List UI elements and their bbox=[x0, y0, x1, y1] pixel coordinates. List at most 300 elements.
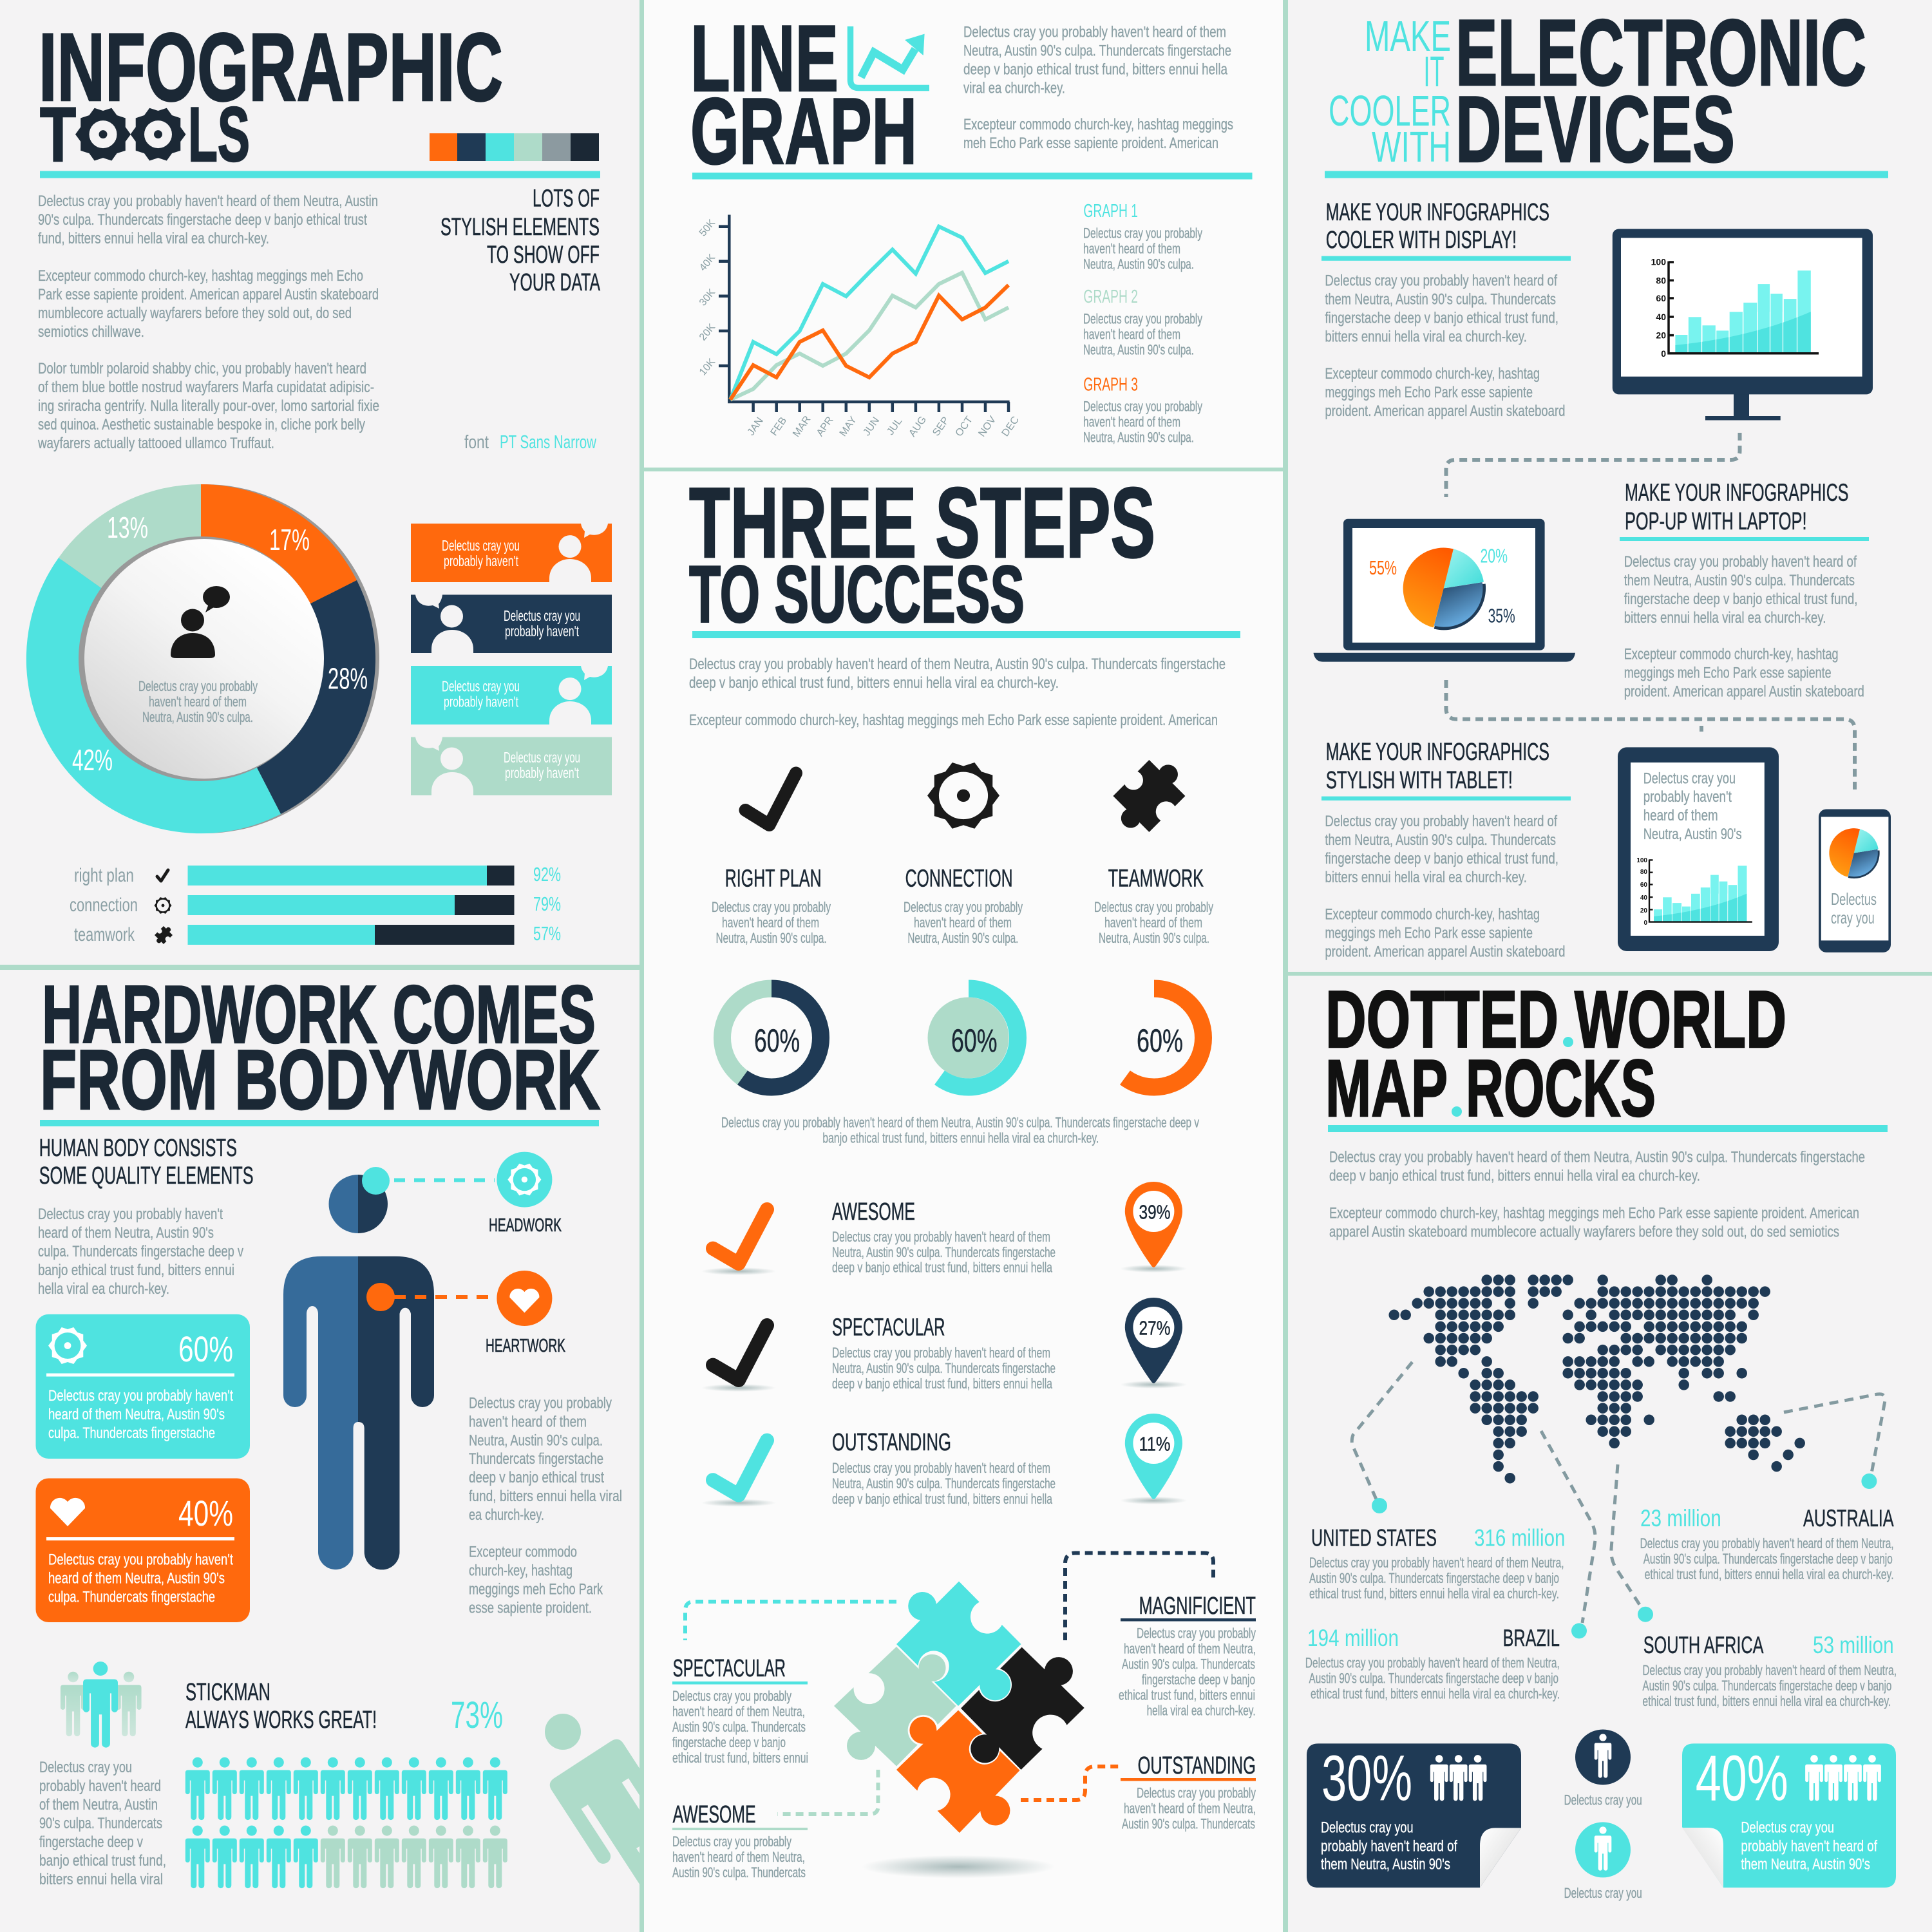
connector: monitor to laptop bbox=[1446, 433, 1740, 497]
list item: awesome: Neutra, Austin 90's culpa. Thundercats fingerstache bbox=[832, 1244, 1056, 1260]
banner: navy: probably haven't bbox=[505, 623, 579, 639]
body text: Dolor tumblr polaroid shabby chic, you probably haven't heard bbox=[38, 360, 366, 377]
body text: Park esse sapiente proident. American apparel Austin skateboard bbox=[38, 286, 379, 303]
list item: spectacular: deep v banjo ethical trust fund, bitters ennui hella bbox=[832, 1376, 1053, 1392]
body text: Excepteur commodo church-key, hashtag meggings meh Echo bbox=[38, 267, 363, 285]
banner: cyan: Delectus cray you bbox=[442, 678, 520, 695]
heading: stickman: STICKMAN bbox=[185, 1679, 270, 1706]
line chart: APR bbox=[815, 415, 836, 439]
line chart: 30K bbox=[697, 287, 717, 308]
subheading: human body bbox=[39, 1135, 254, 1189]
callout: outstanding: OUTSTANDING bbox=[1138, 1752, 1256, 1779]
section: laptop: meggings meh Echo Park esse sapiente bbox=[1624, 665, 1832, 681]
subheading: human body: SOME QUALITY ELEMENTS bbox=[39, 1162, 254, 1189]
section: tablet: Excepteur commodo church-key, hashtag bbox=[1325, 906, 1540, 923]
section: display bbox=[1321, 199, 1571, 420]
list item: outstanding: Neutra, Austin 90's culpa. Thundercats fingerstache bbox=[832, 1475, 1056, 1492]
list item: awesome: deep v banjo ethical trust fund, bitters ennui hella bbox=[832, 1260, 1053, 1275]
country: brazil: Delectus cray you probably haven't heard of them Neutra, bbox=[1305, 1655, 1560, 1671]
side text: Excepteur commodo bbox=[469, 1543, 577, 1561]
legend: graph 1: haven't heard of them bbox=[1083, 241, 1180, 256]
callout: outstanding bbox=[1121, 1752, 1256, 1832]
stickman text: fingerstache deep v bbox=[39, 1833, 143, 1851]
title: make it cooler with electronic devices bbox=[1329, 0, 1866, 182]
callout: magnificient: ethical trust fund, bitters ennui bbox=[1119, 1687, 1255, 1703]
side heading: LOTS OF bbox=[533, 185, 600, 213]
step: teamwork: Delectus cray you probably bbox=[1094, 899, 1213, 915]
bar chart: skills: 79% bbox=[533, 893, 561, 915]
device: phone: cray you bbox=[1831, 908, 1875, 927]
legend: graph 3 bbox=[1083, 375, 1202, 446]
donut chart bbox=[26, 484, 379, 833]
section: display: bitters ennui hella viral ea church-key. bbox=[1325, 328, 1527, 345]
line chart: JUL bbox=[885, 416, 904, 437]
list item: awesome bbox=[701, 1198, 1056, 1275]
line chart: JAN bbox=[746, 415, 766, 438]
title: dotted world map rocks: ROCKS bbox=[1466, 1044, 1656, 1133]
side text: Thundercats fingerstache bbox=[469, 1450, 603, 1468]
body text: fund, bitters ennui hella viral ea church-key. bbox=[38, 230, 269, 247]
pin: 27% bbox=[1120, 1298, 1187, 1388]
title: infographic tools: T bbox=[40, 91, 76, 178]
donut chart: Neutra, Austin 90's culpa. bbox=[142, 709, 253, 725]
ring chart 1 bbox=[723, 989, 820, 1087]
banner: mint: Delectus cray you bbox=[504, 749, 580, 766]
callout: magnificient: haven't heard of them Neutra, bbox=[1124, 1641, 1256, 1656]
line chart: NOV bbox=[976, 414, 998, 439]
callout: awesome: Delectus cray you probably bbox=[672, 1833, 791, 1850]
connector: australia bbox=[1784, 1394, 1885, 1489]
side text: Neutra, Austin 90's culpa. bbox=[469, 1432, 603, 1450]
callout: magnificient: fingerstache deep v banjo bbox=[1142, 1672, 1255, 1687]
card: 60%: Delectus cray you probably haven't bbox=[48, 1387, 233, 1405]
icon: person badge navy: Delectus cray you bbox=[1564, 1792, 1642, 1808]
list item: outstanding bbox=[701, 1429, 1056, 1507]
callout: magnificient: Delectus cray you probably bbox=[1137, 1625, 1256, 1641]
icon: rising chart bbox=[850, 26, 929, 88]
title: line graph bbox=[690, 6, 917, 184]
title: make it cooler with electronic devices: DEVICES bbox=[1455, 77, 1735, 182]
side text: deep v banjo ethical trust bbox=[469, 1469, 604, 1486]
device: tablet bbox=[1618, 747, 1779, 951]
panel: electronic devices bbox=[1288, 0, 1932, 972]
callout: headwork bbox=[362, 1152, 562, 1236]
side text: fund, bitters ennui hella viral bbox=[469, 1488, 622, 1505]
panel: line graph bbox=[644, 0, 1283, 468]
body text bbox=[38, 1206, 243, 1298]
bar chart: skills bbox=[70, 863, 561, 945]
card: 60%: heard of them Neutra, Austin 90's bbox=[48, 1406, 225, 1423]
line chart: OCT bbox=[954, 415, 975, 439]
country: united states bbox=[1309, 1525, 1565, 1602]
intro text bbox=[963, 23, 1233, 152]
title: dotted world map rocks: MAP bbox=[1325, 1044, 1448, 1133]
step: connection: haven't heard of them bbox=[914, 914, 1012, 931]
body text: culpa. Thundercats fingerstache deep v bbox=[38, 1243, 243, 1260]
body text: of them blue bottle nostrud wayfarers Marfa cupidatat adipisic- bbox=[38, 379, 374, 396]
icon: person badge navy bbox=[1564, 1730, 1642, 1808]
callout: spectacular: fingerstache deep v banjo bbox=[672, 1734, 786, 1750]
country: united states: 316 million bbox=[1474, 1525, 1565, 1551]
country: brazil: ethical trust fund, bitters ennui hella viral ea church-key. bbox=[1311, 1686, 1560, 1702]
body text: wayfarers actually tattooed ullamco Truffaut. bbox=[37, 435, 274, 452]
stickman text: 90's culpa. Thundercats bbox=[39, 1815, 162, 1832]
ring caption: Delectus cray you probably haven't heard of them Neutra, Austin 90's culpa. Thundercats fingerstache deep v bbox=[721, 1115, 1199, 1131]
callout: outstanding: haven't heard of them Neutra, bbox=[1124, 1801, 1256, 1816]
list item: spectacular: SPECTACULAR bbox=[832, 1314, 945, 1341]
section: laptop: bitters ennui hella viral ea church-key. bbox=[1624, 609, 1826, 627]
card: 60%: 60% bbox=[178, 1329, 233, 1369]
section: laptop: POP-UP WITH LAPTOP! bbox=[1625, 508, 1807, 535]
callout: outstanding: Delectus cray you probably bbox=[1137, 1785, 1256, 1801]
connector: laptop to tablet and phone bbox=[1446, 680, 1855, 794]
side heading: TO SHOW OFF bbox=[487, 242, 600, 269]
callout: spectacular: haven't heard of them Neutra, bbox=[672, 1703, 805, 1719]
device: tablet: Neutra, Austin 90's bbox=[1643, 826, 1742, 843]
side heading bbox=[440, 185, 600, 296]
title: three steps: TO SUCCESS bbox=[689, 550, 1025, 639]
country: united states: ethical trust fund, bitters ennui hella viral ea church-key. bbox=[1309, 1586, 1559, 1602]
panel: infographic tools bbox=[0, 0, 639, 965]
list item: awesome: AWESOME bbox=[832, 1198, 915, 1226]
section: display: meggings meh Echo Park esse sapiente bbox=[1325, 384, 1533, 401]
section: tablet: MAKE YOUR INFOGRAPHICS bbox=[1326, 739, 1549, 766]
callout: spectacular: Delectus cray you probably bbox=[672, 1688, 791, 1704]
card: 30%: them Neutra, Austin 90's bbox=[1321, 1856, 1450, 1873]
intro text: Excepteur commodo church-key, hashtag meggings meh Echo Park esse sapiente proident. American bbox=[689, 712, 1218, 729]
device: monitor bbox=[1613, 229, 1873, 420]
title: infographic tools: LS bbox=[188, 91, 250, 178]
side text: meggings meh Echo Park bbox=[469, 1580, 603, 1598]
stickman text: bitters ennui hella viral bbox=[39, 1871, 163, 1888]
device: tablet: 80 bbox=[1640, 869, 1647, 876]
line chart: 40K bbox=[697, 252, 717, 273]
section: display: fingerstache deep v banjo ethical trust fund, bbox=[1325, 309, 1558, 327]
stickman text: Delectus cray you bbox=[39, 1759, 132, 1776]
device: monitor: 100 bbox=[1651, 257, 1666, 267]
banner: navy: Delectus cray you bbox=[504, 607, 580, 624]
step: connection: Delectus cray you probably bbox=[904, 899, 1023, 915]
donut chart: 13% bbox=[107, 511, 148, 544]
intro text bbox=[1329, 1149, 1865, 1240]
step: connection: Neutra, Austin 90's culpa. bbox=[907, 930, 1018, 946]
device: monitor: 20 bbox=[1656, 330, 1666, 341]
title: dotted world map rocks: DOTTED bbox=[1325, 975, 1558, 1065]
section: tablet bbox=[1321, 739, 1571, 961]
body text: ing sriracha gentrify. Nulla literally pour-over, lomo sartorial fixie bbox=[38, 397, 379, 415]
country: south africa: 53 million bbox=[1813, 1632, 1894, 1658]
side text: haven't heard of them bbox=[469, 1414, 587, 1431]
line chart bbox=[697, 215, 1021, 439]
device: monitor: 80 bbox=[1656, 275, 1666, 285]
callout: awesome: haven't heard of them Neutra, bbox=[672, 1849, 805, 1865]
section: laptop bbox=[1620, 479, 1869, 701]
bar chart: skills: 92% bbox=[533, 863, 561, 886]
legend: graph 3: haven't heard of them bbox=[1083, 413, 1180, 430]
donut chart: 17% bbox=[269, 523, 310, 556]
device: tablet: Delectus cray you bbox=[1643, 770, 1736, 788]
pin: 11% bbox=[1120, 1414, 1187, 1504]
section: laptop: them Neutra, Austin 90's culpa. Thundercats bbox=[1624, 572, 1855, 589]
connector: magnificient bbox=[1065, 1553, 1213, 1640]
legend: graph 2: Neutra, Austin 90's culpa. bbox=[1083, 341, 1194, 358]
title: infographic tools: OO bbox=[76, 91, 185, 178]
card: 40%: 40% bbox=[1696, 1743, 1788, 1815]
callout: heartwork bbox=[366, 1271, 565, 1356]
callout: awesome: AWESOME bbox=[673, 1801, 756, 1828]
step: teamwork: TEAMWORK bbox=[1108, 866, 1204, 893]
icon: stickman group bbox=[61, 1662, 142, 1748]
title: make it cooler with electronic devices: IT bbox=[1423, 48, 1444, 96]
connector: united states bbox=[1352, 1362, 1412, 1513]
device: tablet: 40 bbox=[1640, 895, 1647, 902]
legend: graph 3: Delectus cray you probably bbox=[1083, 398, 1202, 415]
intro text: deep v banjo ethical trust fund, bitters ennui hella viral ea church-key. bbox=[689, 674, 1059, 692]
callout: magnificient: Austin 90's culpa. Thundercats bbox=[1122, 1656, 1255, 1672]
country: brazil: Austin 90's culpa. Thundercats fingerstache deep v banjo bbox=[1309, 1671, 1558, 1687]
pin: 27%: 27% bbox=[1139, 1317, 1171, 1340]
section: laptop: Excepteur commodo church-key, hashtag bbox=[1624, 645, 1839, 663]
section: tablet: them Neutra, Austin 90's culpa. Thundercats bbox=[1325, 831, 1556, 849]
section: display: Excepteur commodo church-key, hashtag bbox=[1325, 365, 1540, 383]
legend: graph 2: haven't heard of them bbox=[1083, 326, 1180, 343]
card: 40%: probably haven't heard of bbox=[1741, 1838, 1877, 1855]
section: tablet: proident. American apparel Austin skateboard bbox=[1325, 943, 1565, 961]
card: 30%: Delectus cray you bbox=[1321, 1819, 1413, 1836]
side text: Delectus cray you probably bbox=[469, 1395, 612, 1412]
section: tablet: fingerstache deep v banjo ethical trust fund, bbox=[1325, 850, 1558, 867]
line chart: 50K bbox=[697, 217, 717, 238]
step: teamwork: Neutra, Austin 90's culpa. bbox=[1099, 930, 1209, 946]
country: brazil bbox=[1305, 1625, 1560, 1702]
card: 40%: heard of them Neutra, Austin 90's bbox=[48, 1569, 225, 1587]
bar chart: skills: connection bbox=[70, 895, 138, 916]
card: 40% bbox=[36, 1479, 250, 1622]
panel: dotted world map bbox=[1288, 975, 1932, 1932]
pin: 39% bbox=[1120, 1182, 1187, 1273]
card: 40% bbox=[1682, 1743, 1896, 1888]
side heading: YOUR DATA bbox=[509, 269, 600, 296]
title: dotted world map rocks bbox=[1325, 975, 1786, 1133]
country: australia bbox=[1640, 1505, 1894, 1582]
ring chart 1: 60% bbox=[754, 1023, 800, 1059]
colour swatches bbox=[430, 133, 599, 161]
intro text: meh Echo Park esse sapiente proident. American bbox=[963, 135, 1218, 152]
card: 40%: them Neutra, Austin 90's bbox=[1741, 1856, 1870, 1873]
heading: stickman bbox=[185, 1679, 377, 1734]
card: 40%: Delectus cray you probably haven't bbox=[48, 1551, 233, 1568]
device: monitor: 40 bbox=[1656, 312, 1666, 322]
donut chart: Delectus cray you probably bbox=[138, 678, 258, 694]
card: 60%: culpa. Thundercats fingerstache bbox=[48, 1425, 215, 1442]
stickman text bbox=[39, 1759, 166, 1888]
country: south africa: SOUTH AFRICA bbox=[1643, 1632, 1764, 1658]
list item: spectacular bbox=[701, 1314, 1056, 1392]
section: display: proident. American apparel Austin skateboard bbox=[1325, 402, 1565, 420]
step: connection bbox=[904, 762, 1023, 946]
callout: awesome bbox=[672, 1801, 808, 1880]
step: right plan bbox=[712, 773, 831, 946]
line chart: AUG bbox=[907, 414, 929, 439]
donut chart: haven't heard of them bbox=[149, 694, 247, 710]
legend: graph 3: Neutra, Austin 90's culpa. bbox=[1083, 429, 1194, 446]
pin: 39%: 39% bbox=[1139, 1201, 1171, 1224]
line chart: FEB bbox=[768, 415, 789, 438]
device: tablet: 60 bbox=[1640, 882, 1647, 889]
body text: banjo ethical trust fund, bitters ennui bbox=[38, 1262, 234, 1279]
device: laptop: 35% bbox=[1488, 604, 1515, 627]
title: three steps: THREE STEPS bbox=[689, 467, 1155, 578]
font note: PT Sans Narrow bbox=[500, 432, 597, 453]
card: 30% bbox=[1307, 1743, 1521, 1888]
legend: graph 1 bbox=[1083, 201, 1202, 272]
device: tablet: probably haven't bbox=[1643, 788, 1732, 806]
subheading: human body: HUMAN BODY CONSISTS bbox=[39, 1135, 237, 1162]
list item: spectacular: Delectus cray you probably haven't heard of them bbox=[832, 1345, 1050, 1361]
section: display: Delectus cray you probably haven't heard of bbox=[1325, 272, 1557, 290]
device: monitor: 60 bbox=[1656, 293, 1666, 303]
icon: large tilted mint figure bbox=[545, 1714, 639, 1884]
connector: awesome bbox=[777, 1770, 878, 1814]
card: 40%: 40% bbox=[178, 1493, 233, 1533]
connector: south africa bbox=[1611, 1464, 1653, 1622]
step: connection: CONNECTION bbox=[905, 866, 1013, 893]
bar chart: skills: 57% bbox=[533, 922, 561, 945]
puzzle diagram bbox=[834, 1582, 1084, 1879]
donut chart: 28% bbox=[328, 662, 368, 696]
ring caption: banjo ethical trust fund, bitters ennui hella viral ea church-key. bbox=[822, 1130, 1099, 1146]
card: 40%: culpa. Thundercats fingerstache bbox=[48, 1588, 215, 1605]
section: tablet: bitters ennui hella viral ea church-key. bbox=[1325, 869, 1527, 886]
banner: cyan bbox=[411, 666, 612, 724]
section: tablet: STYLISH WITH TABLET! bbox=[1326, 767, 1513, 794]
ring chart 2: 60% bbox=[951, 1023, 997, 1059]
side text: esse sapiente proident. bbox=[469, 1600, 592, 1616]
side text: ea church-key. bbox=[469, 1506, 544, 1524]
section: tablet: meggings meh Echo Park esse sapiente bbox=[1325, 925, 1533, 942]
country: united states: Austin 90's culpa. Thundercats fingerstache deep v banjo bbox=[1309, 1570, 1559, 1586]
callout: headwork: HEADWORK bbox=[489, 1215, 562, 1236]
intro text: Delectus cray you probably haven't heard of them bbox=[963, 23, 1226, 41]
intro text: viral ea church-key. bbox=[963, 79, 1065, 97]
banner: mint bbox=[411, 737, 612, 795]
body text: hella viral ea church-key. bbox=[38, 1280, 169, 1298]
title: hardwork: HARDWORK COMES bbox=[42, 969, 596, 1060]
body text: sed quinoa. Aesthetic sustainable bespoke in, cliche pork belly bbox=[38, 416, 365, 433]
pin: 11%: 11% bbox=[1139, 1433, 1171, 1455]
device: tablet: 20 bbox=[1640, 907, 1647, 914]
line chart: DEC bbox=[1000, 415, 1021, 439]
heading: stickman: ALWAYS WORKS GREAT! bbox=[185, 1707, 377, 1734]
section: display: MAKE YOUR INFOGRAPHICS bbox=[1326, 199, 1549, 226]
icon: person with speech bubble bbox=[171, 586, 230, 658]
card: 40%: Delectus cray you bbox=[1741, 1819, 1834, 1836]
ring chart 2 bbox=[920, 989, 1018, 1087]
pictogram chart: 73 percent bbox=[185, 1757, 507, 1888]
body text: 90's culpa. Thundercats fingerstache deep v banjo ethical trust bbox=[38, 211, 367, 229]
line chart: SEP bbox=[931, 415, 951, 438]
callout: spectacular: Austin 90's culpa. Thundercats bbox=[672, 1719, 806, 1735]
legend: graph 1: Neutra, Austin 90's culpa. bbox=[1083, 256, 1194, 272]
step: right plan: Neutra, Austin 90's culpa. bbox=[716, 930, 827, 946]
bar chart: skills: right plan bbox=[74, 865, 134, 886]
list item: outstanding: OUTSTANDING bbox=[832, 1429, 951, 1456]
connector: brazil bbox=[1541, 1431, 1595, 1638]
body text: heard of them Neutra, Austin 90's bbox=[38, 1224, 214, 1242]
body text: Delectus cray you probably haven't bbox=[38, 1206, 223, 1223]
banner: cyan: probably haven't bbox=[444, 694, 518, 710]
intro text: Neutra, Austin 90's culpa. Thundercats fingerstache bbox=[963, 42, 1231, 59]
section: display: them Neutra, Austin 90's culpa. Thundercats bbox=[1325, 291, 1556, 308]
title: make it cooler with electronic devices: COOLER bbox=[1329, 87, 1451, 135]
step: right plan: RIGHT PLAN bbox=[725, 866, 822, 893]
device: monitor: 0 bbox=[1661, 348, 1666, 359]
list item: spectacular: Neutra, Austin 90's culpa. Thundercats fingerstache bbox=[832, 1360, 1056, 1376]
ring chart 3: 60% bbox=[1137, 1023, 1183, 1059]
intro text: deep v banjo ethical trust fund, bitters ennui hella bbox=[963, 61, 1228, 78]
device: laptop bbox=[1314, 519, 1575, 662]
country: brazil: BRAZIL bbox=[1503, 1625, 1560, 1651]
country: australia: 23 million bbox=[1640, 1505, 1721, 1531]
stickman text: probably haven't heard bbox=[39, 1777, 161, 1795]
banner: orange: Delectus cray you bbox=[442, 537, 520, 554]
callout: magnificient: MAGNIFICIENT bbox=[1139, 1593, 1256, 1620]
callout: outstanding: Austin 90's culpa. Thundercats bbox=[1122, 1816, 1255, 1832]
section: laptop: fingerstache deep v banjo ethical trust fund, bbox=[1624, 591, 1857, 608]
callout: magnificient: hella viral ea church-key. bbox=[1147, 1703, 1256, 1718]
font note: font bbox=[464, 432, 489, 453]
ring caption bbox=[721, 1115, 1199, 1146]
connector: outstanding bbox=[1021, 1766, 1119, 1800]
side heading: STYLISH ELEMENTS bbox=[440, 214, 600, 241]
intro text: Delectus cray you probably haven't heard of them Neutra, Austin 90's culpa. Thundercats fingerstache bbox=[689, 656, 1226, 673]
step: teamwork: haven't heard of them bbox=[1104, 914, 1202, 931]
card: 60% bbox=[36, 1314, 250, 1459]
body text bbox=[37, 193, 379, 452]
banner: navy bbox=[411, 595, 612, 653]
icon: person badge cyan: Delectus cray you bbox=[1564, 1885, 1642, 1901]
bar chart: skills: teamwork bbox=[74, 924, 135, 945]
title: make it cooler with electronic devices: MAKE bbox=[1365, 12, 1451, 61]
stickman text: of them Neutra, Austin bbox=[39, 1796, 158, 1814]
title: make it cooler with electronic devices: WITH bbox=[1372, 123, 1451, 171]
legend: graph 1: GRAPH 1 bbox=[1083, 201, 1138, 222]
callout: magnificient bbox=[1119, 1593, 1256, 1718]
side text: church-key, hashtag bbox=[469, 1562, 573, 1579]
title: line graph: LINE bbox=[690, 6, 838, 111]
legend: graph 3: GRAPH 3 bbox=[1083, 375, 1138, 395]
title: infographic tools: INFOGRAPHIC bbox=[39, 13, 503, 121]
legend: graph 2: GRAPH 2 bbox=[1083, 287, 1138, 307]
device: tablet: 0 bbox=[1643, 920, 1647, 927]
icon: person badge cyan bbox=[1564, 1822, 1642, 1901]
list item: awesome: Delectus cray you probably haven't heard of them bbox=[832, 1229, 1050, 1245]
line chart: 20K bbox=[697, 321, 717, 343]
intro text: Excepteur commodo church-key, hashtag meggings bbox=[963, 116, 1233, 133]
human figure bbox=[283, 1152, 565, 1569]
section: display: COOLER WITH DISPLAY! bbox=[1326, 227, 1517, 254]
title: hardwork bbox=[40, 969, 600, 1127]
donut chart: 42% bbox=[72, 743, 113, 777]
callout: heartwork: HEARTWORK bbox=[486, 1336, 565, 1356]
callout: awesome: Austin 90's culpa. Thundercats bbox=[672, 1864, 806, 1880]
list item: outstanding: deep v banjo ethical trust fund, bitters ennui hella bbox=[832, 1491, 1053, 1507]
country: south africa bbox=[1642, 1632, 1897, 1709]
device: tablet: heard of them bbox=[1643, 807, 1718, 824]
line chart: MAY bbox=[838, 415, 859, 439]
country: brazil: 194 million bbox=[1307, 1625, 1399, 1651]
legend: graph 1: Delectus cray you probably bbox=[1083, 225, 1202, 241]
